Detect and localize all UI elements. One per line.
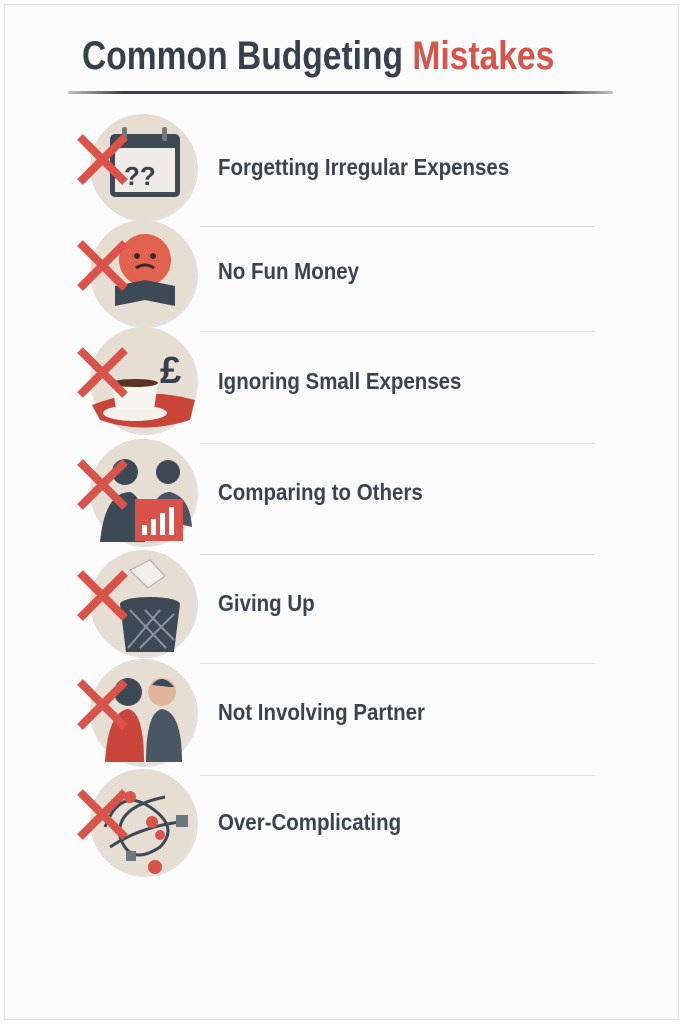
icon: tangled flowchart	[77, 769, 198, 877]
label: Comparing to Others	[218, 479, 423, 505]
row: over-complicating	[77, 769, 401, 877]
row: no fun money	[77, 220, 359, 328]
icon: two people and bar chart	[77, 439, 198, 547]
icon: coffee cup and pound: £	[160, 350, 181, 392]
row: ignoring small expenses	[77, 327, 461, 435]
label: Giving Up	[218, 590, 315, 616]
title: Common Budgeting Mistakes	[82, 34, 554, 78]
icon: waste basket	[77, 550, 198, 658]
icon: calendar with question marks: ??	[124, 161, 156, 191]
label: Not Involving Partner	[218, 699, 425, 725]
label: Forgetting Irregular Expenses	[218, 154, 509, 180]
label: Ignoring Small Expenses	[218, 368, 461, 394]
icon: calendar with question marks	[77, 114, 198, 221]
row: forgetting irregular expenses	[77, 114, 509, 221]
label: No Fun Money	[218, 258, 359, 284]
icon: coffee cup and pound	[77, 327, 198, 435]
icon: two people back to back	[77, 659, 198, 767]
label: Over-Complicating	[218, 809, 401, 835]
icon: sad face with book	[77, 220, 198, 328]
row: not involving partner	[77, 659, 425, 767]
row: comparing to others	[77, 439, 423, 547]
row: giving up	[77, 550, 315, 658]
